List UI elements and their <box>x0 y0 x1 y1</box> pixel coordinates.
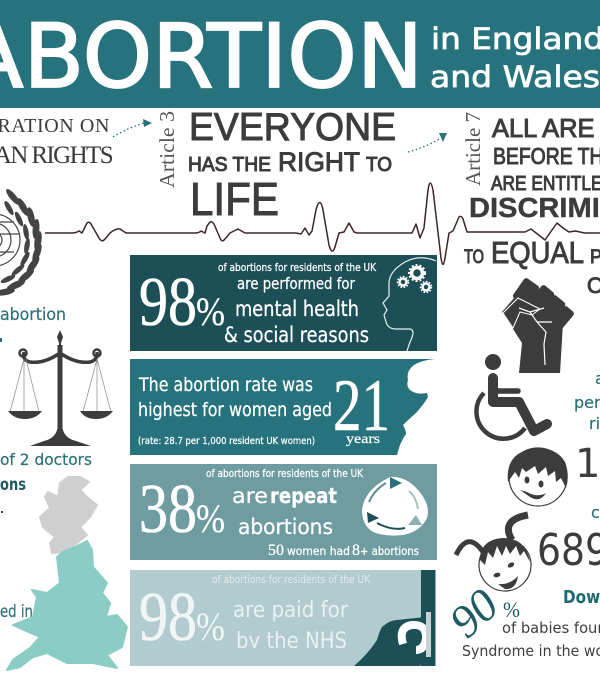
panel background <box>130 359 435 455</box>
torso and legs <box>493 378 547 431</box>
fingers <box>512 277 575 332</box>
percent sign: % <box>196 289 225 334</box>
percent sign: % <box>196 604 225 649</box>
beam <box>24 352 97 362</box>
wreath <box>0 187 44 297</box>
ecg heartbeat line <box>45 183 600 264</box>
icon: wheelchair user <box>476 354 547 439</box>
left pigtail <box>456 542 483 555</box>
icon: recycling loop <box>362 477 428 536</box>
arm <box>495 388 518 394</box>
panel background <box>130 255 437 351</box>
intro text: of abortions for residents of the UK <box>206 467 364 480</box>
head <box>485 354 501 370</box>
ninety: 90 <box>440 579 508 647</box>
beam scrolls <box>20 350 100 356</box>
are paid for: are paid for <box>233 598 349 623</box>
full stop <box>1 511 3 513</box>
equal: EQUAL <box>491 235 584 270</box>
plus abortions: + abortions <box>360 544 419 558</box>
ons: ons <box>0 475 26 495</box>
to: TO <box>366 154 392 176</box>
of 2 doctors: of 2 doctors <box>0 450 92 469</box>
panel: paid for by the NHS <box>130 570 436 666</box>
map: scotland <box>40 477 97 553</box>
rate text line 1: The abortion rate was <box>138 374 313 396</box>
globe <box>0 214 20 266</box>
arrow to article 7 <box>408 133 447 152</box>
icon: united nations emblem <box>0 187 44 297</box>
c: c <box>591 503 600 522</box>
header banner <box>0 0 600 108</box>
subtitle line 1: in England <box>431 22 600 56</box>
icon: raised fist <box>502 277 575 373</box>
icon: head outline <box>383 258 436 351</box>
mark <box>0 338 2 342</box>
left pan <box>8 411 42 419</box>
panel background <box>130 570 435 666</box>
face <box>479 539 531 591</box>
banner background <box>0 0 600 108</box>
face <box>509 448 567 506</box>
map: england and wales <box>7 541 127 670</box>
icon: gears <box>398 265 432 292</box>
icon: dark side bar <box>421 570 436 666</box>
right pigtail <box>508 515 528 540</box>
percent: % <box>503 597 520 622</box>
strings <box>10 359 111 412</box>
hair <box>508 448 568 488</box>
rate text line 2: highest for women aged <box>138 399 332 421</box>
article 3 label: Article 3 <box>155 111 179 188</box>
teal arrow head <box>390 477 402 489</box>
intro text: of abortions for residents of the UK <box>218 261 377 274</box>
right pan <box>80 411 113 419</box>
abortion: abortion <box>0 305 66 325</box>
grey arrow head <box>408 515 422 525</box>
panel: abortion rate by age <box>130 359 445 455</box>
are performed for: are performed for <box>237 274 355 293</box>
article 7 statement <box>464 113 600 298</box>
icon: girl face <box>456 515 531 591</box>
woman silhouette <box>397 359 445 455</box>
are: are <box>232 484 268 508</box>
eight: 8 <box>352 542 360 559</box>
panel: repeat abortions <box>130 464 437 560</box>
social reasons: & social reasons <box>224 323 369 347</box>
left column: legal text fragments <box>0 305 92 622</box>
heading: universal declaration on human rights <box>0 115 113 169</box>
ed in: ed in <box>0 602 33 622</box>
repeat: repeat <box>270 484 337 508</box>
arrow to article 3 <box>113 119 152 137</box>
everyone: EVERYONE <box>189 106 396 149</box>
pole <box>58 345 62 437</box>
wheel <box>476 393 525 439</box>
percentage number: 38 <box>139 471 197 548</box>
mouth <box>520 490 546 499</box>
ri: ri <box>589 414 600 433</box>
eyes <box>524 476 530 484</box>
subtitle line 2: and Wales <box>430 60 600 94</box>
loop arcs <box>369 483 386 502</box>
life: LIFE <box>190 173 279 225</box>
article 7 label: Article 7 <box>461 112 485 186</box>
finial <box>57 330 63 350</box>
rate footnote: (rate: 28.7 per 1,000 resident UK women) <box>138 436 315 447</box>
base <box>30 425 91 446</box>
down syndrome statistic <box>440 579 600 660</box>
intro text: of abortions for residents of the UK <box>212 573 371 586</box>
mouth <box>498 576 518 589</box>
article 3 statement <box>188 106 396 225</box>
to: TO <box>464 247 484 268</box>
hair <box>480 538 530 565</box>
abortions: abortions <box>238 515 333 539</box>
percentage number: 98 <box>139 264 197 341</box>
has the: HAS THE <box>188 154 271 176</box>
fifty: 50 <box>268 542 284 559</box>
panel: mental health and social reasons <box>130 255 437 351</box>
by the NHS: by the NHS <box>236 629 347 654</box>
icon: card slot <box>426 612 431 657</box>
icon: white card curve <box>402 625 426 650</box>
dark arrow head <box>367 512 379 523</box>
right column: statistic fragments <box>537 369 600 608</box>
women had: women had <box>287 544 350 558</box>
palm <box>502 290 563 373</box>
icon: scales of justice <box>8 330 113 446</box>
thumb <box>503 298 540 328</box>
right: RIGHT <box>278 147 360 177</box>
percent sign: % <box>196 496 225 541</box>
age number: 21 <box>333 365 390 447</box>
loop disc <box>362 477 428 536</box>
per: per <box>574 393 600 412</box>
eyes <box>493 572 501 578</box>
percentage number: 98 <box>139 579 197 656</box>
cracks <box>519 308 552 365</box>
mental health: mental health <box>235 297 359 321</box>
icon: hand <box>354 617 425 666</box>
years: years <box>346 432 380 447</box>
panel background <box>130 464 437 560</box>
icon: boy face <box>508 448 568 506</box>
